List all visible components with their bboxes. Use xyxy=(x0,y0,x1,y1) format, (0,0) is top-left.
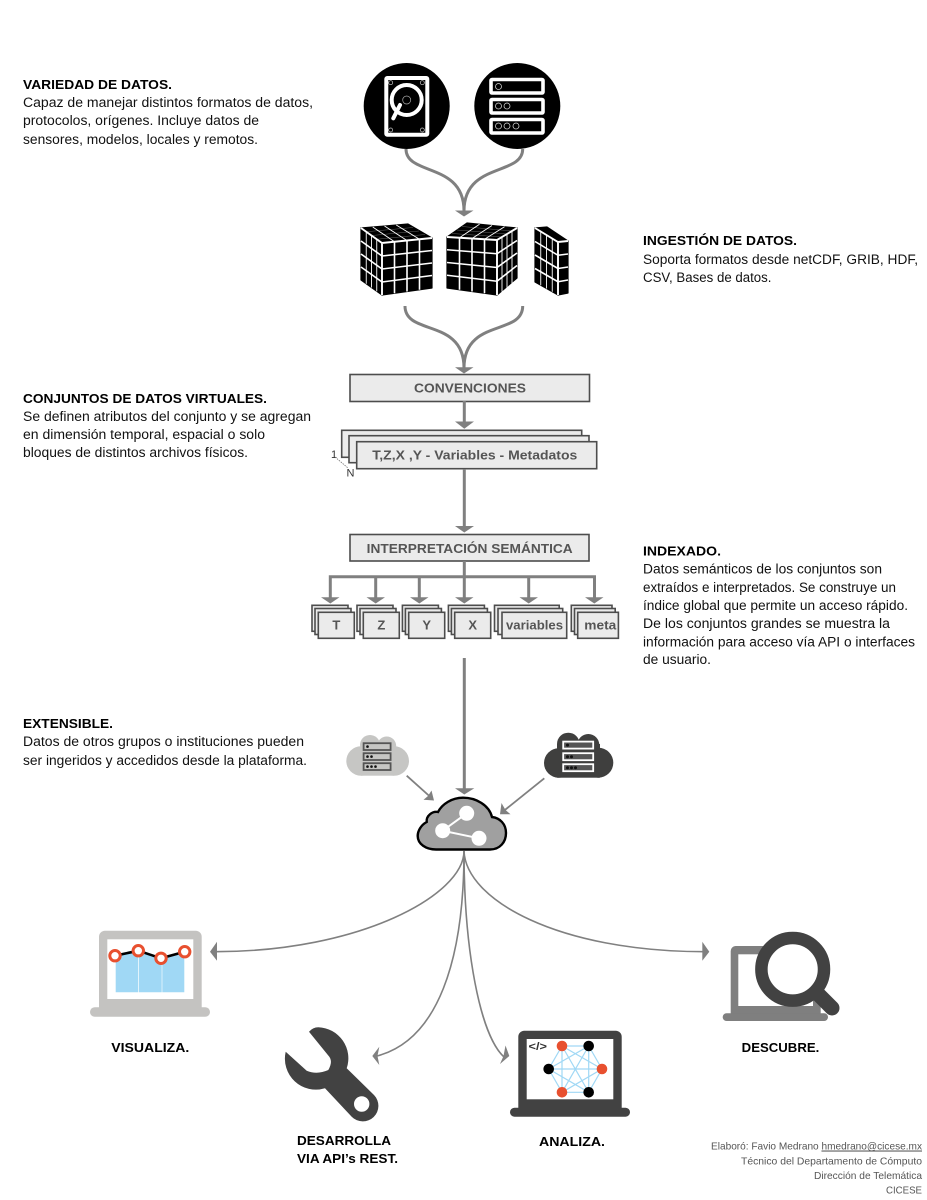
stack: Z: Z xyxy=(377,618,385,632)
icon: laptop with chart xyxy=(90,931,210,1017)
box: interpretación semántica xyxy=(350,534,589,561)
stack: X xyxy=(448,605,491,638)
credits: Dirección de Telemática xyxy=(814,1170,922,1182)
label: analiza: ANALIZA. xyxy=(539,1134,605,1149)
arrow: cubes merge xyxy=(405,306,523,374)
text block: extensible xyxy=(23,716,307,768)
text block: indexado: INDEXADO. xyxy=(643,544,721,558)
box: interpretación semántica: INTERPRETACIÓN SEMÁNTICA xyxy=(367,541,573,556)
text block: indexado: De los conjuntos grandes se muestra la xyxy=(643,616,890,631)
arrow: to analiza xyxy=(464,851,509,1064)
text block: variedad de datos: protocolos, orígenes. Incluye datos de xyxy=(23,113,259,128)
icon: laptop with network graph xyxy=(510,1031,630,1117)
text block: indexado xyxy=(643,544,915,667)
stack: T: T xyxy=(332,618,340,632)
text block: variedad de datos: VARIEDAD DE DATOS. xyxy=(23,77,172,92)
text block: ingestión de datos xyxy=(643,233,918,285)
text block: indexado: Datos semánticos de los conjuntos son xyxy=(643,562,882,576)
stack: variables: variables xyxy=(506,618,563,632)
arrow: sources merge xyxy=(406,149,523,216)
text block: conjuntos de datos virtuales: en dimensión temporal, espacial o solo xyxy=(23,427,265,442)
text block: extensible: ser ingeridos y accedidos desde la plataforma. xyxy=(23,753,307,768)
icon: data slice xyxy=(535,227,568,295)
text block: extensible: EXTENSIBLE. xyxy=(23,716,113,731)
label: desarrolla via api rest: VIA API’s REST. xyxy=(297,1151,398,1166)
arrow: datasets to interpretation xyxy=(455,469,474,532)
text block: indexado: extraídos e interpretados. Se construye un xyxy=(643,580,896,595)
text block: variedad de datos: Capaz de manejar distintos formatos de datos, xyxy=(23,95,313,110)
stack: Y xyxy=(402,605,445,638)
credits: Elaboró: Favio Medrano hmedrano@cicese.mx xyxy=(711,1140,923,1152)
icon: light server cloud xyxy=(346,735,409,776)
text block: conjuntos de datos virtuales xyxy=(23,391,311,460)
text block: indexado: índice global que permite un acceso rápido. xyxy=(643,598,908,613)
credits: CICESE xyxy=(886,1184,922,1196)
arrow: to visualiza xyxy=(210,851,464,961)
icon: dark server cloud xyxy=(544,733,613,778)
text block: conjuntos de datos virtuales: bloques de distintos archivos físicos. xyxy=(23,445,248,460)
arrow: dark cloud to platform xyxy=(500,778,544,814)
text block: variedad de datos xyxy=(23,77,313,147)
text block: extensible: Datos de otros grupos o instituciones pueden xyxy=(23,734,304,749)
box: convenciones xyxy=(350,374,590,402)
arrow: light cloud to platform xyxy=(407,776,434,800)
label: 1 to N: N xyxy=(346,468,354,480)
stack: variables xyxy=(494,605,567,638)
icon: laptop with network graph: </> xyxy=(528,1041,547,1053)
credits: Técnico del Departamento de Cómputo xyxy=(741,1156,922,1168)
icon: server rack xyxy=(474,63,560,149)
stack: Z xyxy=(357,605,399,638)
icon: data cube 1 xyxy=(361,224,432,295)
stacked boxes: virtual datasets xyxy=(342,430,597,469)
box: convenciones: CONVENCIONES xyxy=(414,380,526,396)
arrow: to descubre xyxy=(464,851,709,961)
text block: ingestión de datos: CSV, Bases de datos. xyxy=(643,270,772,285)
stack: X: X xyxy=(468,618,477,632)
arrow: to desarrolla xyxy=(372,851,464,1065)
stack: meta: meta xyxy=(584,618,617,632)
text block: indexado: de usuario. xyxy=(643,652,711,667)
text block: ingestión de datos: Soporta formatos desde netCDF, GRIB, HDF, xyxy=(643,252,918,267)
text block: indexado: información para acceso vía API o interfaces xyxy=(643,634,915,650)
label: descubre: DESCUBRE. xyxy=(742,1040,819,1055)
label: desarrolla via api rest: DESARROLLA xyxy=(297,1133,392,1148)
stack: Y: Y xyxy=(422,618,431,632)
arrow: index to cloud xyxy=(455,658,474,794)
icon: laptop with magnifier xyxy=(723,938,832,1021)
stacked boxes: virtual datasets: T,Z,X ,Y - Variables - Metadatos xyxy=(372,448,577,462)
arrow: convenciones to datasets xyxy=(455,401,474,429)
text block: variedad de datos: sensores, modelos, locales y remotos. xyxy=(23,132,258,147)
arrow tree: semantic branches xyxy=(321,561,604,604)
text block: ingestión de datos: INGESTIÓN DE DATOS. xyxy=(643,233,797,248)
text block: conjuntos de datos virtuales: Se definen atributos del conjunto y se agregan xyxy=(23,409,311,424)
label: desarrolla via api rest xyxy=(297,1133,398,1166)
label: visualiza: VISUALIZA. xyxy=(111,1040,189,1055)
credits xyxy=(711,1140,923,1196)
icon: hard disk xyxy=(364,63,450,149)
label: 1 to N: 1 xyxy=(331,449,337,461)
text block: conjuntos de datos virtuales: CONJUNTOS DE DATOS VIRTUALES. xyxy=(23,391,267,406)
icon: central share cloud xyxy=(418,798,506,850)
icon: wrench xyxy=(285,1027,378,1121)
stack: T xyxy=(312,605,354,638)
stack: meta xyxy=(571,605,618,638)
label: 1 to N xyxy=(331,449,354,480)
icon: data cube 2 xyxy=(447,223,517,295)
